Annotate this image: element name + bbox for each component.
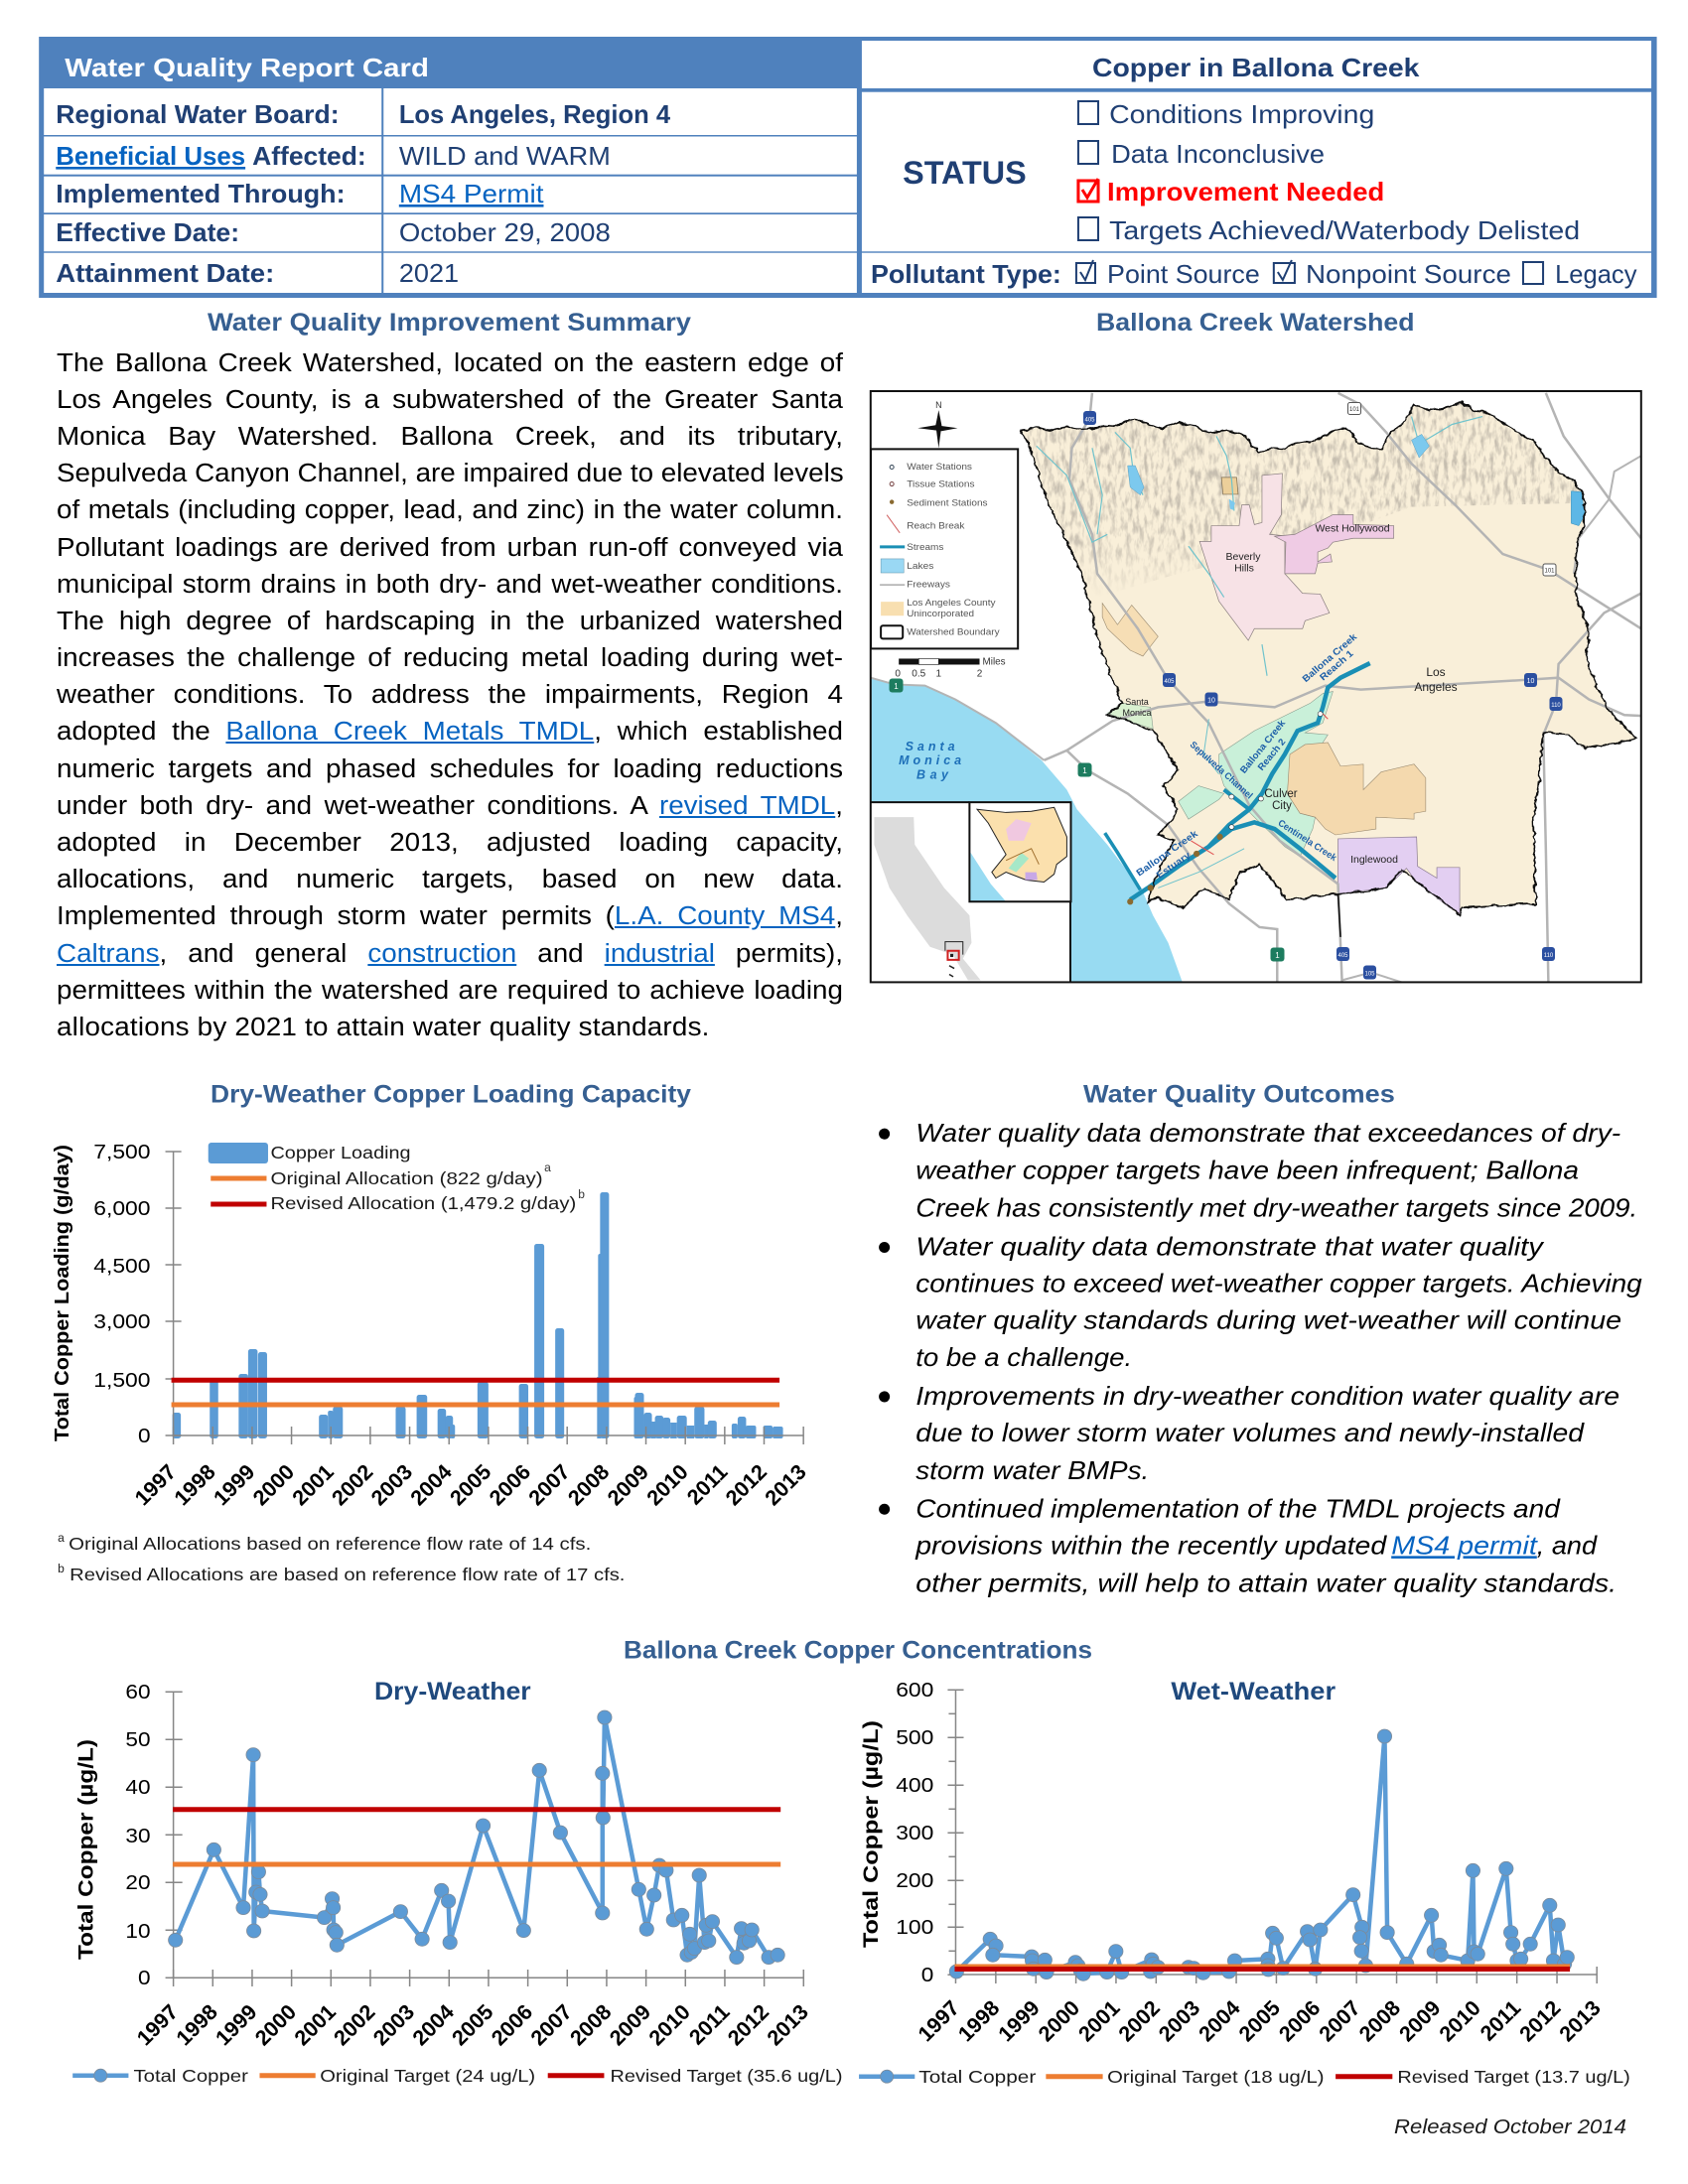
dry chart y axis labels: 30 [125,1826,151,1847]
implemented through row: MS4 Permit [399,179,544,208]
wet chart target lines [954,1967,1570,1970]
regional water board row [56,99,671,129]
dry chart x axis labels: 2000 [250,2000,301,2050]
dry chart legend [72,2066,842,2086]
bullet 2: to be a challenge. [915,1344,1132,1372]
loading x axis labels: 2003 [366,1460,417,1510]
loading y axis labels: 7,500 [93,1142,150,1163]
dry chart x axis labels: 2007 [526,2000,577,2050]
dry chart x axis labels: 2009 [605,2000,655,2050]
wet chart axes [947,1690,1597,1983]
allocation lines [172,1380,779,1405]
map scale bar: 0.5 [912,669,926,680]
summary paragraph: under both dry- and wet-weather conditions. A revised TMDL, [57,792,843,820]
dry chart x axis labels: 2011 [684,2000,735,2049]
map shields: 101 [1544,568,1555,574]
loading x axis labels: 2010 [642,1460,693,1510]
outcomes list [879,1120,1642,1597]
map scale bar: Miles [983,656,1006,667]
map city labels: Monica [1122,708,1152,718]
wet chart x axis labels: 2003 [1154,1996,1204,2046]
map legend: Watershed Boundary [907,626,1000,637]
dry chart x axis labels: 2002 [330,2000,380,2050]
loading x axis labels: 2006 [485,1460,535,1510]
status checklist: Data Inconclusive [1111,139,1325,169]
loading x axis labels: 2008 [563,1460,614,1510]
pollutant type row: Nonpoint Source [1306,259,1511,289]
map shields: 110 [1544,953,1554,959]
map city labels: Culver [1264,788,1298,800]
map legend: Water Stations [907,462,972,473]
wet chart x axis labels: 2006 [1274,1996,1325,2046]
summary paragraph: adopted the Ballona Creek Metals TMDL, which established [57,718,843,746]
wet chart x axis labels: 2011 [1476,1996,1525,2045]
bullet 3 [879,1383,1619,1485]
loading x axis labels: 2012 [721,1460,772,1510]
regional water board row: Regional Water Board: [56,99,340,129]
map legend: Unincorporated [907,609,974,619]
loading x axis labels [130,1460,811,1510]
map city labels: Hills [1234,562,1254,574]
summary paragraph: The Ballona Creek Watershed, located on the eastern edge of [57,349,843,377]
wet chart x axis labels: 2004 [1195,1996,1245,2046]
loading legend: Revised Allocation (1,479.2 g/day) [270,1193,576,1213]
loading axes [166,1152,803,1444]
dry chart x axis labels: 2001 [290,2000,341,2050]
beneficial uses row: Beneficial Uses [56,141,245,171]
dry chart y axis title: Total Copper (µg/L) [74,1739,97,1960]
release date: Released October 2014 [1394,2116,1626,2138]
bullet 2: Water quality data demonstrate that water quality [915,1234,1545,1262]
wet chart x axis labels: 2010 [1435,1996,1485,2046]
bullet 1: Creek has consistently met dry-weather targets since 2009. [915,1194,1637,1222]
wet chart x axis labels: 2012 [1515,1996,1566,2046]
loading legend [209,1143,585,1213]
dry chart target lines [173,1810,780,1864]
summary paragraph: of metals (including copper, lead, and zinc) in the water column. [57,496,843,524]
loading x axis labels: 2005 [445,1460,495,1510]
bullet 4: other permits, will help to attain water quality standards. [915,1570,1617,1597]
dry chart x axis labels: 2004 [408,2000,459,2050]
pollutant type row: Legacy [1555,259,1636,289]
summary paragraph: adopted in December 2013, adjusted loading capacity, [57,829,843,857]
dry chart x axis labels: 2008 [566,2000,617,2050]
dry chart x axis labels: 1999 [211,2000,262,2050]
summary paragraph: The high degree of hardscaping in the urbanized watershed [57,608,843,635]
map stream labels: Ballona Creek [1238,718,1289,776]
map stream labels: Ballona Creek [1301,631,1360,685]
dry chart x axis labels: 2006 [487,2000,537,2050]
loading y axis labels: 4,500 [93,1256,150,1278]
bullet 1: Water quality data demonstrate that exceedances of dry- [915,1120,1620,1148]
bullet 2: water quality standards during wet-weather will continue [915,1307,1621,1335]
map shields: 405 [1337,953,1348,959]
footnotes: Original Allocations based on reference flow rate of 14 cfs. [69,1534,591,1554]
map stream labels: Reach 1 [1318,648,1356,683]
map stream labels: Centinela Creek [1276,818,1338,864]
wet chart title: Wet-Weather [1171,1678,1336,1706]
wet chart x axis labels: 2009 [1395,1996,1445,2046]
wet chart legend [859,2067,1630,2087]
map legend: Los Angeles County [907,598,996,609]
wet chart legend: Total Copper [918,2067,1036,2087]
dry chart y axis labels: 40 [125,1777,151,1799]
bullet 2 [879,1234,1642,1372]
map shields: 1 [1082,766,1087,775]
summary paragraph: permittees within the watershed are required to achieve loading [57,977,843,1005]
loading legend: a [544,1160,551,1174]
map city labels: West Hollywood [1315,522,1390,534]
loading x axis labels: 2011 [682,1460,732,1509]
wet chart x axis labels: 1999 [994,1996,1045,2046]
status checklist: Improvement Needed [1107,177,1384,206]
map city labels: Angeles [1414,680,1458,694]
wet chart legend: Revised Target (13.7 ug/L) [1397,2067,1630,2087]
dry chart y axis labels: 20 [125,1872,151,1894]
dry chart y axis labels: 0 [138,1968,151,1989]
map shields: 1 [894,682,899,691]
bullet 4: Continued implementation of the TMDL projects and [915,1495,1561,1523]
map shields: 405 [1084,417,1095,423]
summary paragraph: allocations, and numeric targets, based on new data. [57,866,843,893]
loading legend: Original Allocation (822 g/day) [270,1168,543,1188]
map shields: 1 [1275,951,1280,960]
map city labels: Beverly [1225,551,1261,563]
summary paragraph: weather conditions. To address the impairments, Region 4 [57,681,843,709]
dry chart x axis labels: 2005 [448,2000,498,2050]
dry chart y axis labels: 60 [125,1682,151,1704]
effective date row: October 29, 2008 [399,217,611,247]
pollutant type row [871,259,1636,289]
summary paragraph: Implemented through storm water permits (L.A. County MS4, [57,902,843,930]
bullet 2: continues to exceed wet-weather copper targets. Achieving [915,1271,1642,1298]
dry chart x axis labels: 2003 [368,2000,419,2050]
map scale bar: 2 [977,669,983,680]
map shields: 10 [1207,697,1215,705]
dry chart legend: Original Target (24 ug/L) [320,2066,535,2086]
loading y axis labels [93,1142,150,1447]
regional water board row: Los Angeles, Region 4 [399,99,671,129]
map city labels: Los [1426,665,1446,679]
loading x axis labels: 2013 [761,1460,811,1510]
map legend: Streams [907,542,944,553]
loading x axis labels: 2002 [328,1460,377,1510]
footnotes: a [58,1531,65,1545]
effective date row: Effective Date: [56,217,239,247]
loading x axis labels: 2000 [248,1460,299,1510]
wet chart data series [949,1729,1574,1980]
wet chart x axis labels: 2007 [1315,1996,1365,2046]
map city labels: City [1272,800,1292,812]
loading y axis title: Total Copper Loading (g/day) [52,1145,73,1441]
heading: loading chart: Dry-Weather Copper Loading Capacity [211,1081,691,1109]
map legend: Freeways [907,580,950,591]
wet chart y axis labels: 600 [896,1680,933,1702]
dry chart legend: Total Copper [133,2066,248,2086]
loading y axis labels: 3,000 [93,1311,150,1333]
pollutant type row: Point Source [1107,259,1260,289]
loading x axis labels: 2001 [288,1460,339,1510]
map shields: 10 [1527,678,1534,685]
effective date row [56,217,611,247]
attainment date row: 2021 [399,258,459,288]
map bay label [899,740,961,782]
wet chart x axis labels: 2005 [1234,1996,1285,2046]
bar chart: dry-weather copper loading [52,1142,811,1510]
wet chart x axis labels: 2001 [1074,1996,1125,2046]
footnotes: Revised Allocations are based on reference flow rate of 17 cfs. [70,1565,625,1584]
map shields [890,403,1563,979]
dry chart y axis labels [125,1682,151,1989]
attainment date row [56,258,459,288]
wet chart x axis labels: 2000 [1034,1996,1084,2046]
wet chart x axis labels: 2008 [1354,1996,1405,2046]
map frame [871,391,1641,982]
report card table [39,37,1657,298]
wet chart y axis labels: 300 [896,1823,933,1844]
wet chart x axis labels [914,1996,1606,2046]
map legend: Sediment Stations [907,498,988,509]
status checklist: Targets Achieved/Waterbody Delisted [1109,215,1580,245]
line chart: dry-weather concentrations [72,1678,842,2086]
bullet 3: due to lower storm water volumes and newly-installed [915,1420,1585,1447]
dry chart x axis labels: 1998 [172,2000,222,2050]
wet chart y axis labels: 500 [896,1727,933,1749]
map legend: Reach Break [907,520,965,531]
summary paragraph: numeric targets and phased schedules for loading reductions [57,755,843,783]
beneficial uses row [56,141,611,171]
bullet 1: weather copper targets have been infrequent; Ballona [915,1157,1579,1184]
dry chart x axis labels: 1997 [132,2000,183,2050]
beneficial uses row: WILD and WARM [399,141,611,171]
map stream labels: Sepulveda Channel [1188,740,1254,801]
bullet 4: provisions within the recently updated [914,1532,1387,1560]
heading: summary: Water Quality Improvement Summary [208,309,691,337]
status checklist: Conditions Improving [1109,99,1374,129]
bullet 3: Improvements in dry-weather condition water quality are [915,1383,1619,1411]
wet chart x axis labels: 1998 [953,1996,1004,2046]
summary paragraph: increases the challenge of reducing metal loading during wet- [57,644,843,672]
map bay label: Santa [906,740,955,753]
loading y axis labels: 1,500 [93,1370,150,1392]
summary paragraph: allocations by 2021 to attain water quality standards. [57,1014,710,1041]
map bay label: Bay [916,768,949,782]
wet chart y axis labels: 0 [921,1965,933,1986]
dry chart data series [169,1710,784,1965]
map city labels [1122,522,1458,866]
map shields: 101 [1349,407,1360,413]
map legend: Tissue Stations [907,479,975,490]
footnotes [58,1531,625,1584]
summary paragraph: Caltrans, and general construction and industrial permits), [57,940,843,968]
pollutant type row: Pollutant Type: [871,259,1061,289]
map: Ballona Creek watershed [871,391,1641,982]
dry chart y axis labels: 10 [125,1921,151,1943]
footnotes: b [58,1562,65,1575]
bullet 4 [879,1495,1617,1597]
summary paragraph [57,349,844,1041]
summary paragraph: Sepulveda Canyon Channel, are impaired due to elevated levels [57,460,844,487]
loading x axis labels: 2007 [524,1460,575,1510]
map city labels: Santa [1125,697,1149,707]
loading bars [173,1192,783,1438]
line chart: wet-weather concentrations [859,1678,1630,2087]
pollutant title: Copper in Ballona Creek [1092,53,1420,82]
attainment date row: Attainment Date: [56,258,274,288]
loading x axis labels: 1999 [210,1460,259,1510]
map scale bar: 1 [936,669,942,680]
map compass [917,400,957,448]
status label: STATUS [903,155,1027,191]
wet chart y axis labels [896,1680,933,1986]
dry chart title: Dry-Weather [374,1678,531,1706]
loading x axis labels: 2009 [603,1460,653,1510]
implemented through row: Implemented Through: [56,179,346,208]
loading legend: b [578,1187,585,1201]
implemented through row [56,179,544,208]
dry chart x axis labels: 2013 [763,2000,813,2050]
loading legend: Copper Loading [270,1143,411,1162]
map city labels: Inglewood [1350,854,1398,866]
heading: watershed map: Ballona Creek Watershed [1096,309,1414,337]
wet chart legend: Original Target (18 ug/L) [1107,2067,1325,2087]
dry chart x axis labels: 2010 [644,2000,695,2050]
heading: concentrations: Ballona Creek Copper Concentrations [624,1637,1092,1665]
heading: outcomes: Water Quality Outcomes [1083,1081,1395,1109]
wet chart y axis labels: 100 [896,1917,933,1939]
map shields: 110 [1551,703,1561,709]
bullet 1 [879,1120,1637,1222]
wet chart y axis title: Total Copper (µg/L) [860,1720,883,1948]
map shields: 405 [1164,679,1175,685]
beneficial uses row: Affected: [252,141,366,171]
table title: Water Quality Report Card [65,53,429,82]
wet chart x axis labels: 2002 [1114,1996,1165,2046]
map legend: Lakes [907,561,934,572]
map stream labels: Reach 2 [1256,737,1288,773]
status checklist [1078,99,1580,245]
dry chart legend: Revised Target (35.6 ug/L) [610,2066,842,2086]
map shields: 105 [1364,971,1375,977]
summary paragraph: Pollutant loadings are derived from urban run-off conveyed via [57,534,843,562]
map scale bar [895,656,1006,680]
summary paragraph: municipal storm drains in both dry- and wet-weather conditions. [57,571,843,599]
map stream labels: Ballona Creek [1135,828,1200,879]
map bay label: Monica [899,753,961,767]
dry chart x axis labels: 2012 [723,2000,774,2050]
wet chart y axis labels: 200 [896,1870,933,1892]
map compass: N [935,400,942,410]
bullet 3: storm water BMPs. [915,1457,1149,1485]
map inset: California [871,802,1070,982]
map legend [871,449,1018,648]
bullet 4: MS4 permit [1391,1532,1538,1560]
loading y axis labels: 6,000 [93,1198,150,1220]
loading y axis labels: 0 [138,1426,150,1447]
map stream labels [1135,631,1360,882]
dry chart x axis labels [132,2000,813,2050]
summary paragraph: Los Angeles County, is a subwatershed of the Greater Santa [57,386,843,414]
bullet 4: , and [1537,1532,1598,1560]
map stream labels: Estuary [1155,850,1194,882]
loading x axis labels: 1998 [170,1460,220,1510]
map scale bar: 0 [895,669,901,680]
wet chart x axis labels: 2013 [1555,1996,1606,2046]
loading x axis labels: 1997 [130,1460,181,1510]
summary paragraph: Monica Bay Watershed. Ballona Creek, and its tributary, [57,423,843,451]
dry chart axes [166,1692,803,1986]
dry chart y axis labels: 50 [125,1729,151,1751]
wet chart y axis labels: 400 [896,1775,933,1797]
loading x axis labels: 2004 [406,1460,457,1510]
wet chart x axis labels: 1997 [914,1996,964,2046]
